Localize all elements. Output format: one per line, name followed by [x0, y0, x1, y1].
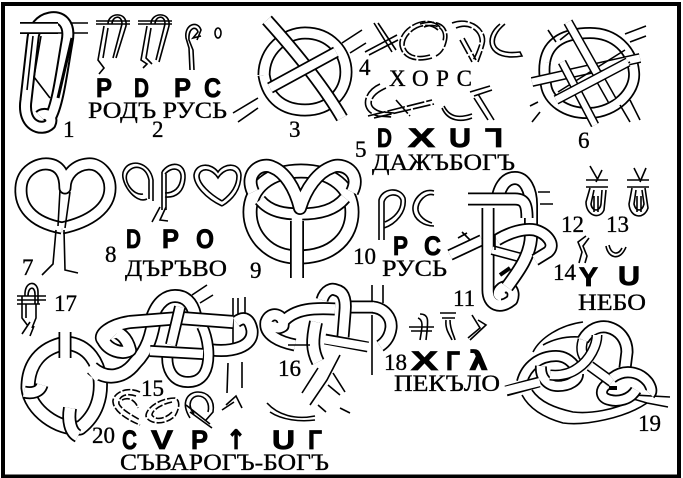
- rune letters: Svarog: U: [272, 425, 295, 455]
- label: Nebo: НЕБО: [578, 290, 646, 315]
- knot 20 ring: [24, 315, 155, 436]
- knot 17: [17, 283, 46, 336]
- knot 13: [627, 168, 649, 216]
- number 15: 15: [141, 376, 164, 401]
- number 9: 9: [250, 258, 262, 283]
- rune letters: Svarog: [122, 425, 322, 456]
- rune letters: Nebo: Y: [579, 262, 598, 292]
- number 8: 8: [105, 242, 116, 267]
- label: Khors: ХОРС: [389, 66, 472, 91]
- knot 8 small figures: [123, 163, 241, 222]
- knot 9: [250, 166, 355, 279]
- rune letters: Svarog: ↑: [226, 425, 246, 456]
- rune letters: Rus: C: [424, 231, 441, 261]
- rune letters: Nebo: [579, 261, 640, 292]
- rune letters: Drevo: O: [196, 224, 214, 254]
- number 17: 17: [54, 291, 77, 316]
- knot 10 small figures: [379, 190, 434, 240]
- knot 2 small figures: [96, 15, 221, 74]
- rune letters: Dazhbog: D: [377, 123, 392, 153]
- rune letters: Peklo: Г: [446, 346, 460, 376]
- knot 20 small figures: [113, 390, 213, 428]
- number 14: 14: [553, 260, 576, 285]
- rune letters: Rus: P: [393, 231, 408, 261]
- number 19: 19: [638, 411, 661, 436]
- rune letters: Rod Rus: C: [204, 73, 221, 103]
- rune letters: Rus: [393, 231, 441, 261]
- knot 16: [266, 285, 391, 405]
- rune letters: Nebo: U: [618, 261, 640, 291]
- knot 7: [21, 164, 110, 275]
- knot 19: [504, 322, 670, 424]
- rune letters: Rod Rus: D: [134, 73, 149, 103]
- number 16: 16: [278, 356, 301, 381]
- number 10: 10: [353, 244, 376, 269]
- knot 3: [233, 20, 366, 122]
- rune letters: Svarog: P: [191, 425, 208, 455]
- number 18: 18: [384, 350, 407, 375]
- rune letters: Peklo: λ: [469, 346, 488, 377]
- knot 6: [530, 22, 646, 125]
- label: Drevo: ДЪРЪВО: [125, 256, 227, 281]
- rune letters: Peklo: X: [411, 346, 438, 376]
- number 3: 3: [289, 117, 300, 142]
- label: Dazhbog: ДАЖЪБОГЪ: [372, 150, 515, 175]
- rune letters: Drevo: [126, 224, 214, 254]
- rune letters: Svarog: C: [122, 425, 137, 455]
- knot 11: [450, 178, 553, 305]
- number 2: 2: [152, 117, 164, 142]
- label: Rod Rus: РОДЪ РУСЬ: [88, 98, 227, 123]
- number 4: 4: [359, 55, 371, 80]
- knot 18 small figures: [409, 313, 486, 340]
- rune letters: Svarog: Г: [308, 425, 322, 455]
- rune letters: Drevo: P: [162, 224, 179, 254]
- bottom arcs under knot 16: [267, 403, 350, 421]
- label: Peklo: ПЕКЪЛО: [394, 371, 500, 396]
- rune letters: Dazhbog: X: [408, 123, 435, 153]
- number 11: 11: [453, 286, 475, 311]
- number 12: 12: [561, 212, 584, 237]
- number 13: 13: [606, 212, 629, 237]
- knot 4 small figures: [365, 21, 522, 120]
- number 5: 5: [355, 137, 366, 162]
- rune letters: Svarog: V: [151, 425, 173, 455]
- number 1: 1: [63, 117, 74, 142]
- rune letters: Dazhbog: Г: [485, 123, 503, 153]
- label: Svarog-Bog: СЪВАРОГЪ-БОГЪ: [120, 450, 329, 475]
- rune letters: Drevo: D: [126, 224, 141, 254]
- knot 14 small figures: [578, 236, 626, 263]
- rune letters: Peklo: [411, 346, 488, 377]
- rune letters: Dazhbog: [377, 123, 503, 153]
- number 7: 7: [22, 255, 34, 280]
- number 6: 6: [578, 128, 590, 153]
- knot 1: [20, 18, 88, 127]
- rune letters: Dazhbog: U: [449, 123, 471, 153]
- number 20: 20: [92, 423, 115, 448]
- rune letters: Rod Rus: P: [96, 73, 112, 103]
- rune letters: Rod Rus: P: [174, 73, 191, 103]
- label: Rus: РУСЬ: [382, 256, 447, 281]
- knot 12: [586, 166, 608, 216]
- rune letters: Rod Rus: [96, 73, 221, 103]
- knot 15: [102, 285, 252, 410]
